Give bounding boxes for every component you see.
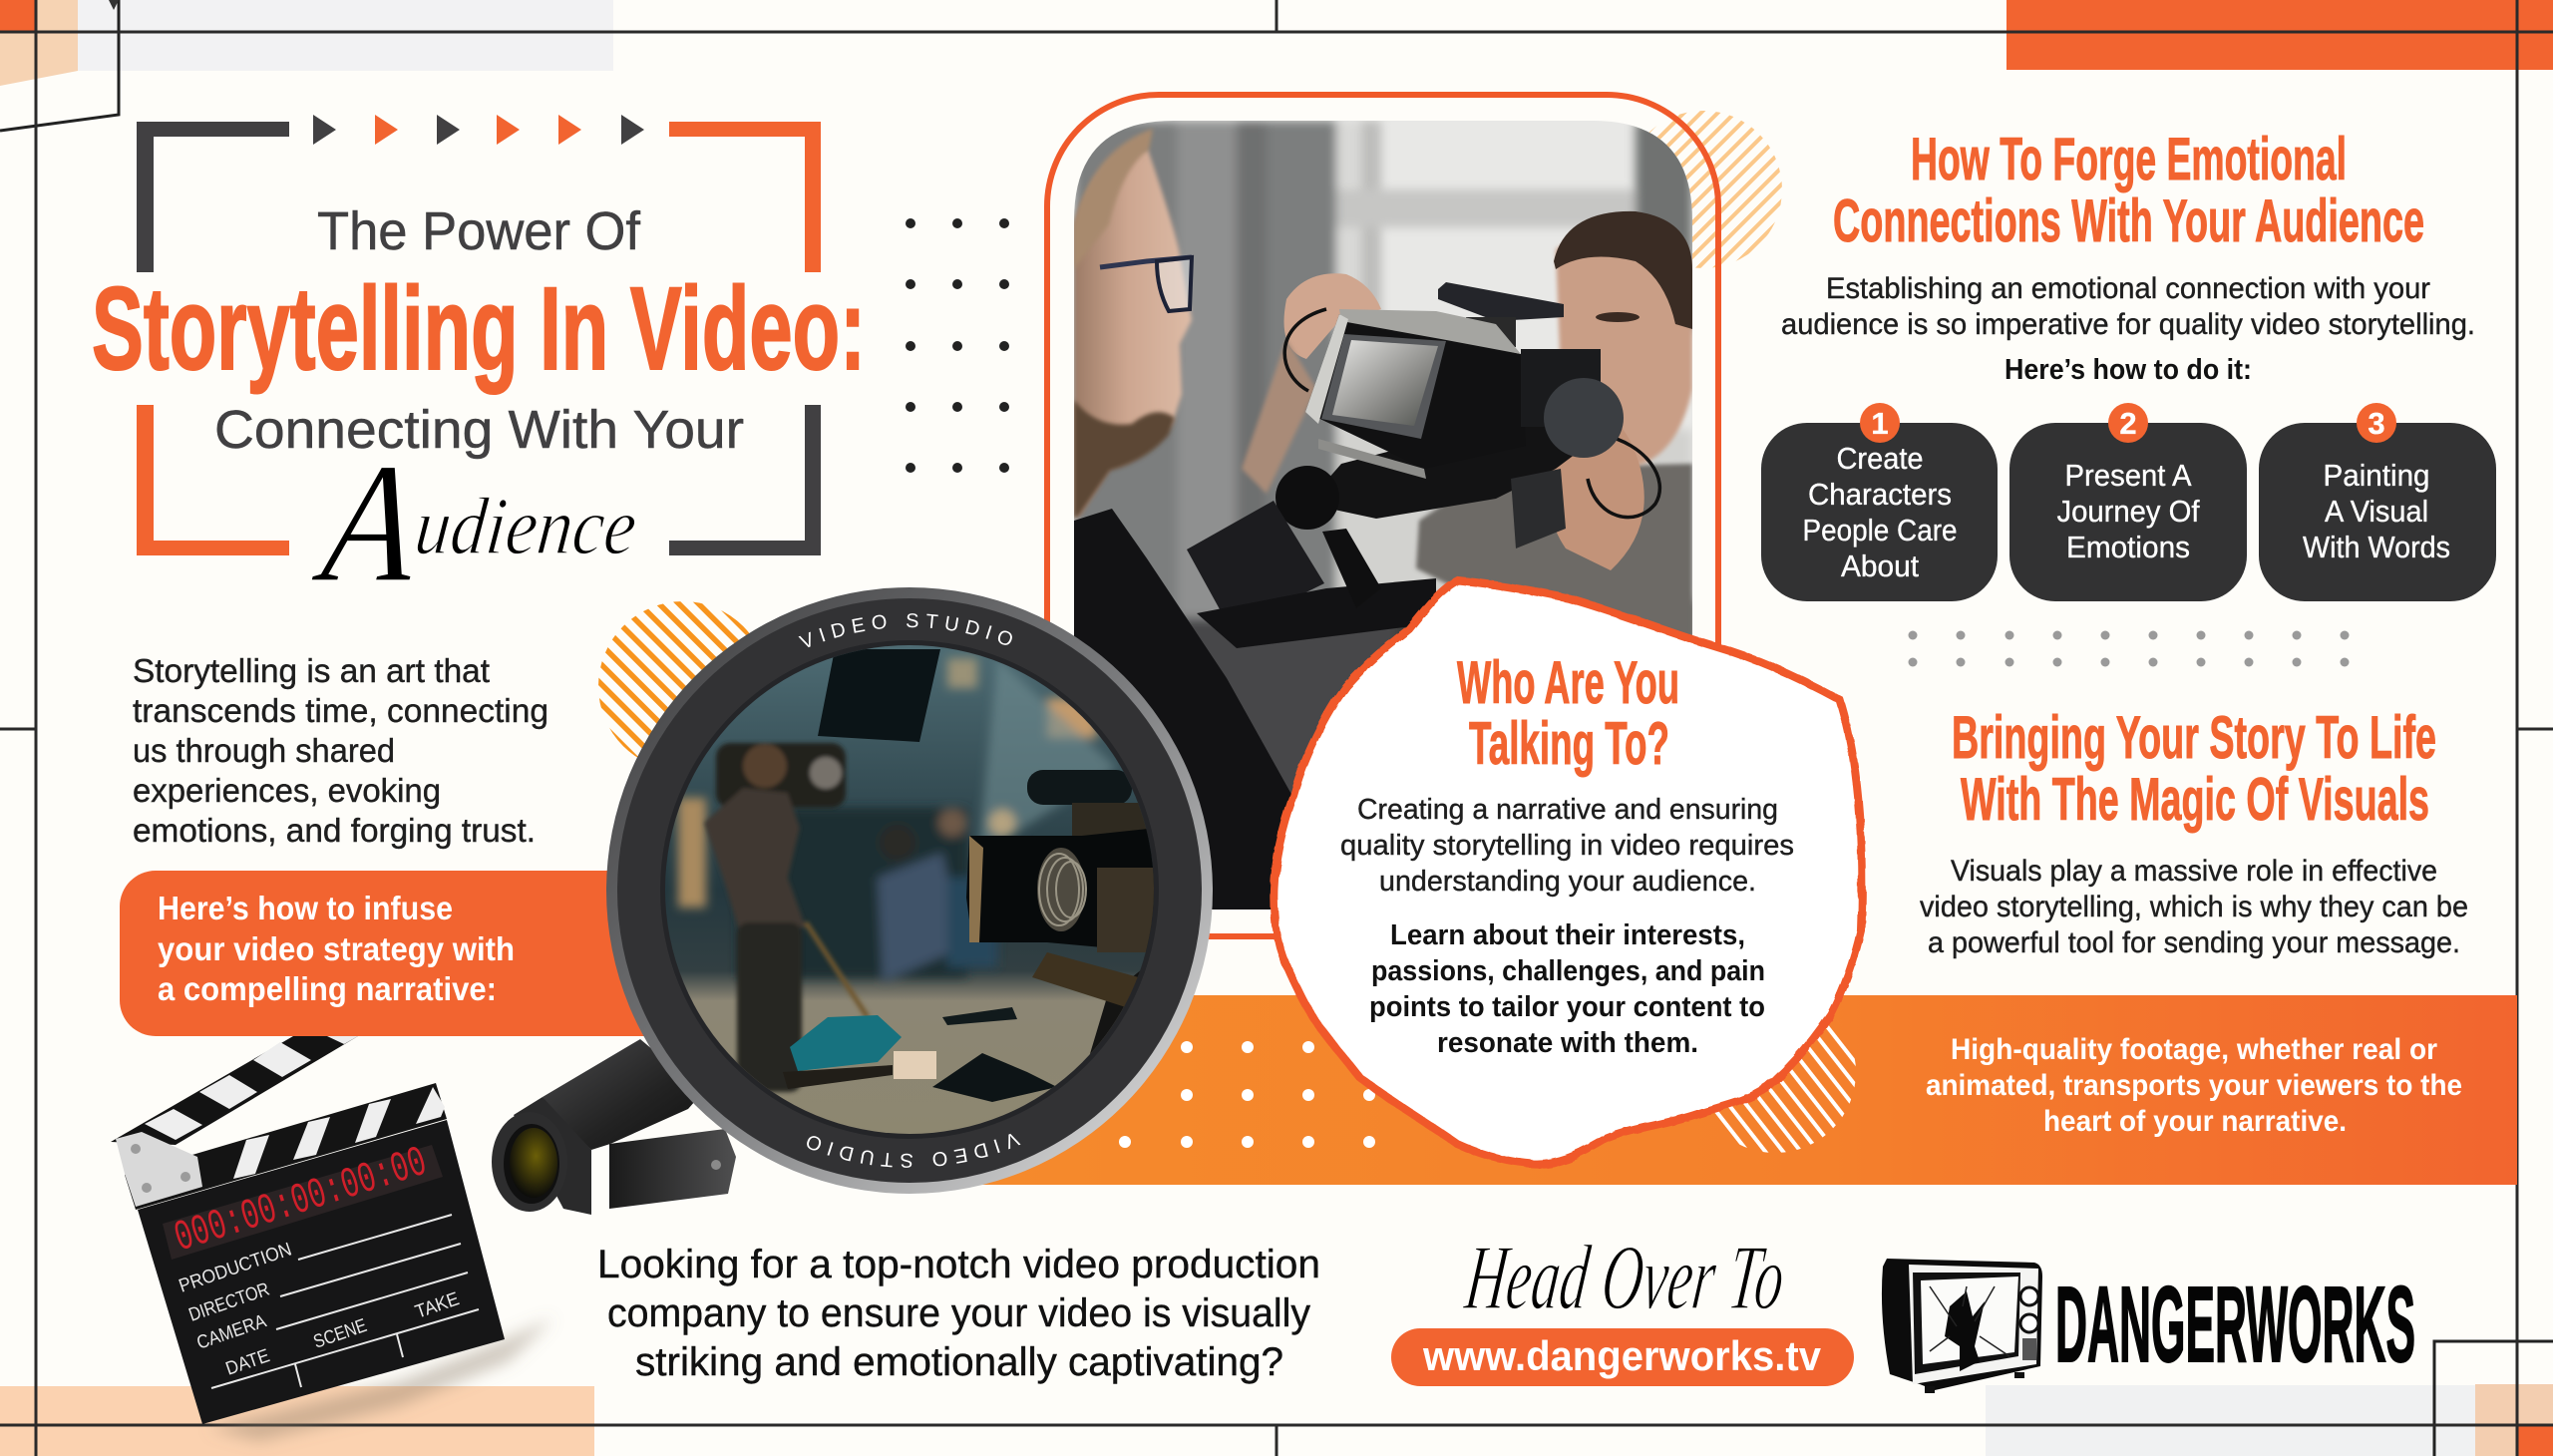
photo: camera crew <box>1074 121 1692 910</box>
blob bold text: resonate with them. <box>1437 1027 1698 1059</box>
corner shape: bottom left <box>0 1386 594 1456</box>
card 2: Present A <box>2064 458 2192 493</box>
blob bold text: passions, challenges, and pain <box>1371 955 1765 987</box>
slate labels: TAKE <box>413 1288 462 1323</box>
blob body <box>1340 794 1794 898</box>
LED timer panel <box>163 1145 443 1260</box>
striped circle behind magnifier <box>598 601 768 771</box>
title line 3: Connecting With Your <box>214 400 744 460</box>
script: head over to: Head Over To <box>1460 1227 1790 1329</box>
callout pill: how to infuse: a compelling narrative: <box>158 970 497 1007</box>
corner shapes: bottom right <box>1986 1341 2553 1456</box>
slate labels: CAMERA <box>194 1310 269 1354</box>
striped circle: top right of photo <box>1625 111 1782 268</box>
card 1: 1 <box>1871 406 1889 441</box>
dotted divider <box>1909 630 2350 666</box>
white blob panel: who are you talking to <box>1274 580 1862 1164</box>
card 2: Journey Of <box>2056 494 2200 529</box>
card 2 <box>2009 403 2247 601</box>
logo: broken TV <box>1882 1259 2042 1393</box>
card 1: Create <box>1837 441 1923 476</box>
right man <box>1242 211 1692 638</box>
card 3 <box>2259 403 2496 601</box>
callout text: Here’s how to infuse <box>158 890 453 926</box>
orange band <box>977 995 2517 1185</box>
blob body: Creating a narrative and ensuring <box>1357 794 1778 826</box>
band text: heart of your narrative. <box>2043 1105 2347 1138</box>
title line 2: Storytelling In Video: <box>92 263 866 395</box>
section: bringing your story to life <box>1920 704 2468 959</box>
lens ring text: VIDEO STUDIO <box>798 613 1012 648</box>
corner shapes: top left <box>0 0 613 131</box>
band text: animated, transports your viewers to the <box>1926 1069 2462 1102</box>
slate labels: PRODUCTION <box>177 1239 294 1297</box>
call to action text <box>597 1243 1320 1384</box>
slate labels <box>177 1239 462 1380</box>
paragraph: a powerful tool for sending your message. <box>1928 926 2460 959</box>
foreground cinema camera <box>966 770 1154 1055</box>
slate labels: DIRECTOR <box>186 1279 272 1326</box>
left man <box>1074 129 1293 910</box>
title script word: A <box>307 428 427 618</box>
paragraph: video storytelling, which is why they can be <box>1920 891 2468 923</box>
website pill: www.dangerworks.tv <box>1422 1332 1822 1379</box>
section: emotional connections <box>1761 126 2496 601</box>
card 2: 2 <box>2119 406 2137 441</box>
card 3: A Visual <box>2325 494 2428 529</box>
hinge <box>116 1132 202 1207</box>
card 3: With Words <box>2303 530 2450 564</box>
blob bold text <box>1369 919 1765 1059</box>
intro paragraph: transcends time, connecting <box>133 692 548 729</box>
band text <box>1926 1033 2462 1138</box>
callout pill: how to infuse <box>120 871 758 1036</box>
floor props <box>783 1007 1057 1102</box>
lens photo: film studio <box>658 638 1162 1142</box>
paragraph: Visuals play a massive role in effective <box>1951 855 2437 888</box>
intro paragraph: emotions, and forging trust. <box>133 812 536 849</box>
clapperboard <box>111 1036 553 1441</box>
gimbal camera <box>1187 282 1659 648</box>
card 1 <box>1761 403 1998 601</box>
title script word: udience <box>411 481 641 571</box>
white blob panel: who are you talking to: Talking To? <box>1469 710 1669 777</box>
card 1: About <box>1841 548 1919 583</box>
title line 1: The Power Of <box>317 201 641 261</box>
paragraph: Establishing an emotional connection with your <box>1826 272 2430 305</box>
band text: High-quality footage, whether real or <box>1951 1033 2437 1066</box>
card 3: Painting <box>2324 458 2429 493</box>
clapper top bar <box>125 1083 447 1210</box>
title brackets <box>137 122 821 555</box>
call to action text: striking and emotionally captivating? <box>635 1340 1283 1384</box>
intro paragraph: us through shared <box>133 732 395 769</box>
clapperboard: 000:00:00:00:00 <box>169 1139 433 1264</box>
intro paragraph: experiences, evoking <box>133 772 441 809</box>
title block <box>92 115 866 618</box>
clapper body <box>138 1120 505 1424</box>
call to action text: Looking for a top-notch video production <box>597 1243 1320 1286</box>
paragraph <box>1920 855 2468 959</box>
dot grid <box>906 218 1009 473</box>
photo frame <box>1047 95 1718 936</box>
lead-in: Here’s how to do it: <box>2005 354 2252 386</box>
blob bold text: Learn about their interests, <box>1390 919 1745 951</box>
title arrows <box>313 115 644 145</box>
magnifier lens: VIDEO STUDIO <box>807 1133 1021 1168</box>
card 2: Emotions <box>2066 530 2190 564</box>
blob bold text: points to tailor your content to <box>1369 991 1765 1023</box>
intro paragraph: Storytelling is an art that <box>133 652 490 689</box>
blob heading: Who Are You <box>1457 649 1679 716</box>
card 3: 3 <box>2368 406 2385 441</box>
corner shape: top right <box>2006 0 2553 70</box>
call to action text: company to ensure your video is visually <box>607 1291 1310 1335</box>
slate labels: DATE <box>223 1345 272 1380</box>
band dots <box>1119 1041 1375 1148</box>
small video camera <box>492 1039 736 1215</box>
magnifier lens <box>606 587 1213 1194</box>
blob body: quality storytelling in video requires <box>1340 830 1794 862</box>
striped circle on band <box>1715 1021 1856 1153</box>
slate labels: SCENE <box>311 1315 370 1353</box>
callout pill: how to infuse: your video strategy with <box>158 930 515 967</box>
clapper arm <box>111 1036 358 1145</box>
intro paragraph <box>133 652 548 849</box>
paragraph <box>1781 272 2475 341</box>
card 1: Characters <box>1808 477 1952 512</box>
paragraph: audience is so imperative for quality video storytelling. <box>1781 308 2475 341</box>
blob body: understanding your audience. <box>1379 866 1756 898</box>
card 1: People Care <box>1803 513 1957 547</box>
